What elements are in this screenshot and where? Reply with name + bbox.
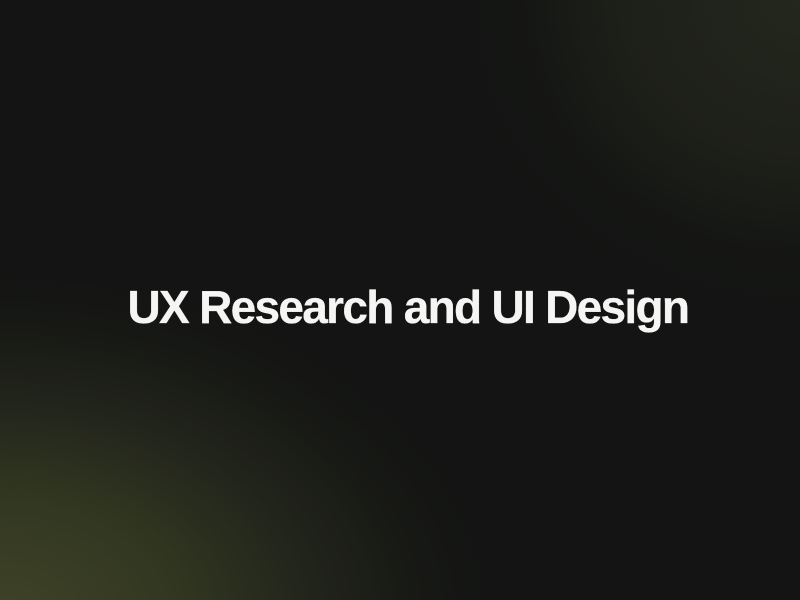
title: UX Research and UI Design <box>128 281 688 333</box>
